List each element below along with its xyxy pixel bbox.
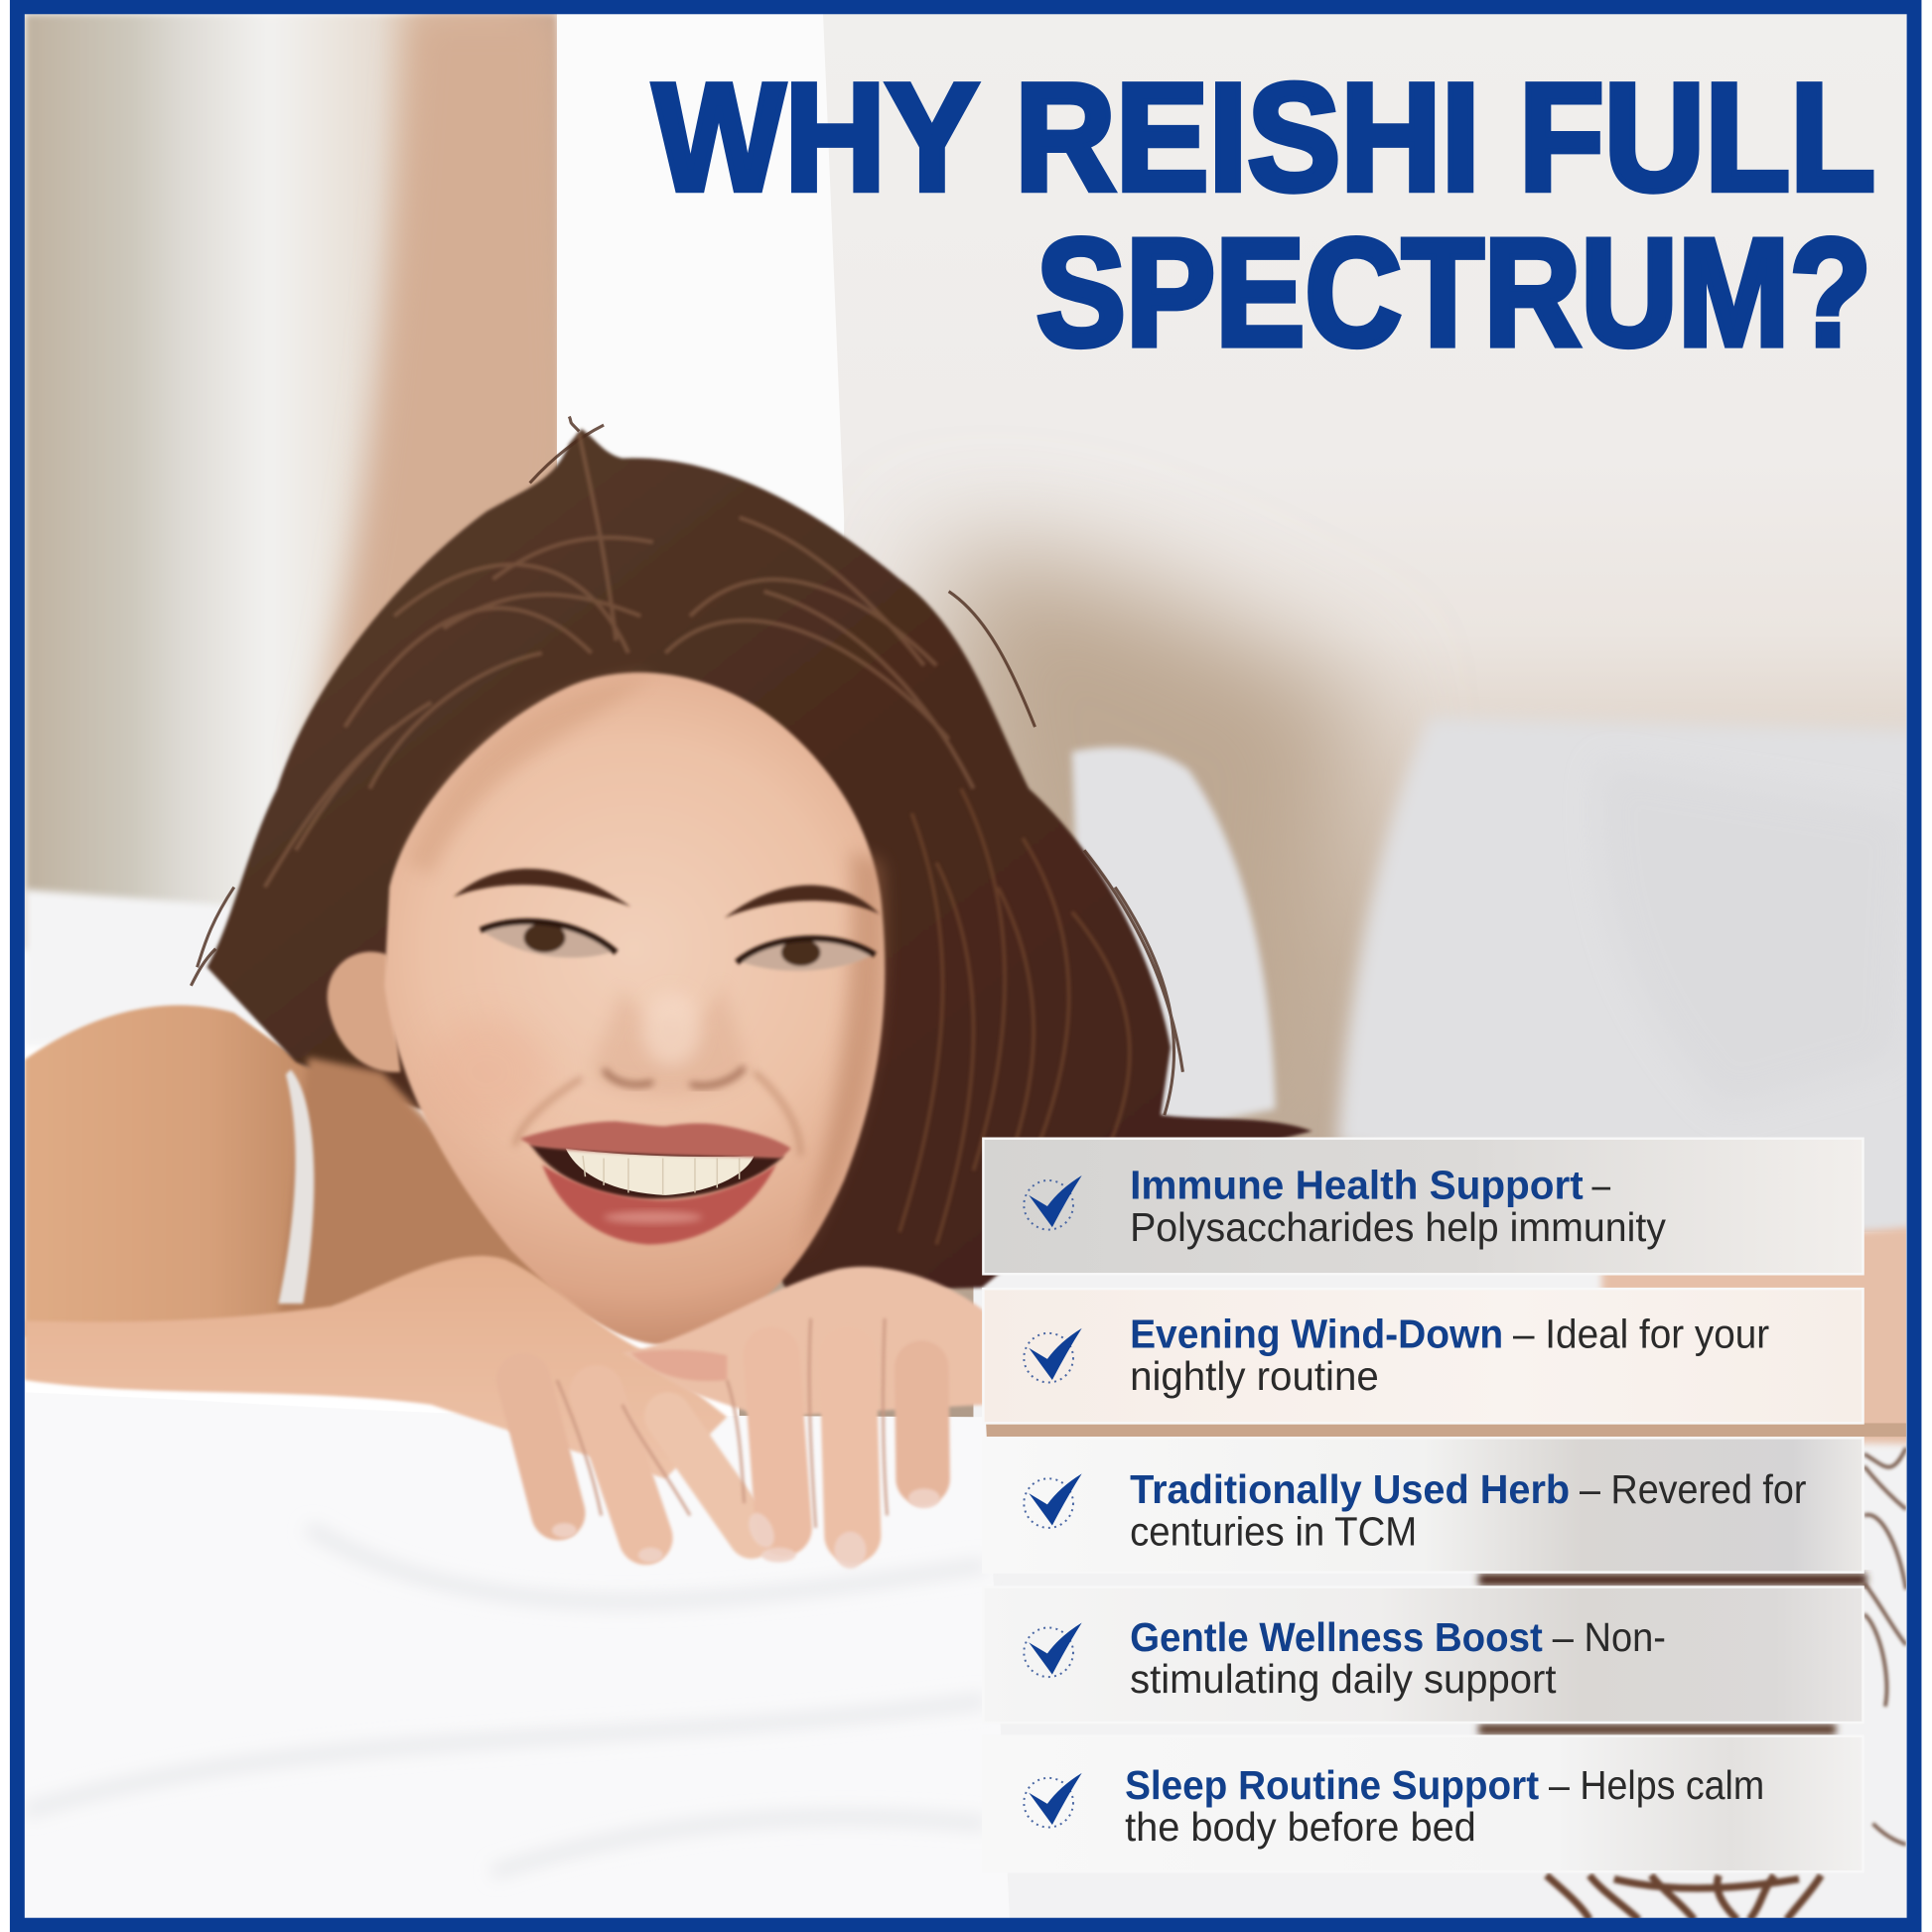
curtains bbox=[25, 14, 557, 950]
middle pillow bbox=[1072, 747, 1276, 1128]
hair highlights bbox=[265, 434, 973, 888]
item text: stimulating daily support bbox=[1130, 1656, 1557, 1702]
icon: check bbox=[1024, 1175, 1082, 1230]
title bbox=[653, 52, 1875, 377]
finger lines bbox=[557, 1318, 888, 1528]
left eye bbox=[481, 921, 617, 958]
item text bbox=[1130, 1311, 1769, 1399]
panel: traditionally used herb bbox=[983, 1438, 1863, 1573]
left sheet behind shoulder bbox=[25, 886, 256, 1044]
item text: Sleep Routine Support bbox=[1125, 1762, 1539, 1808]
panel background bbox=[983, 1736, 1863, 1871]
left cheek blush bbox=[425, 1017, 548, 1128]
right arm bbox=[1601, 1226, 1922, 1445]
item text: – Revered for bbox=[1580, 1466, 1806, 1512]
item text: – bbox=[1591, 1163, 1610, 1208]
top strap bbox=[278, 1069, 314, 1304]
item text bbox=[1130, 1614, 1666, 1702]
right eyebrow bbox=[725, 885, 880, 918]
lower right bed area bbox=[973, 1232, 1922, 1932]
item text: centuries in TCM bbox=[1130, 1508, 1417, 1554]
panel: gentle wellness boost bbox=[983, 1587, 1863, 1723]
white curtain panel bbox=[557, 14, 844, 537]
upper lip bbox=[520, 1121, 791, 1159]
neck and chest bbox=[278, 1057, 617, 1318]
sheet folds bbox=[25, 1528, 986, 1872]
nose shading bbox=[593, 980, 747, 1096]
hair highlights right side bbox=[899, 788, 1130, 1244]
icon: check bbox=[1024, 1328, 1082, 1382]
forehead shadow bbox=[407, 675, 653, 875]
lower lip highlight bbox=[604, 1211, 702, 1223]
smile lines bbox=[515, 1072, 801, 1156]
item text: Evening Wind-Down bbox=[1130, 1311, 1503, 1357]
item text: nightly routine bbox=[1130, 1353, 1379, 1399]
nose tip highlight bbox=[642, 992, 701, 1066]
item text bbox=[1130, 1163, 1666, 1250]
forearm and left hand bbox=[25, 1256, 727, 1478]
pillow crease bbox=[1599, 763, 1910, 1109]
white bed sheet bbox=[739, 1416, 987, 1492]
left eyebrow bbox=[454, 869, 630, 906]
right hand back bbox=[622, 1267, 986, 1417]
ear bbox=[328, 952, 400, 1072]
mouth interior bbox=[530, 1144, 783, 1199]
item text: the body before bed bbox=[1125, 1804, 1476, 1850]
right eye bbox=[737, 938, 875, 971]
back of shoulder bbox=[25, 1006, 333, 1337]
finger nails bbox=[552, 1488, 940, 1569]
item text: – Non- bbox=[1553, 1614, 1666, 1660]
dark hair band between panels 3 and 4 bbox=[1478, 1574, 1866, 1586]
right hand fingers bbox=[771, 1355, 923, 1535]
item text: – Ideal for your bbox=[1513, 1311, 1769, 1357]
item text: – Helps calm bbox=[1549, 1762, 1764, 1808]
item text bbox=[1125, 1762, 1764, 1850]
tan curtain lower taper bbox=[308, 14, 573, 763]
face bbox=[384, 672, 885, 1345]
wall and headboard bbox=[740, 14, 1922, 1492]
hair mass bbox=[207, 429, 1312, 1294]
panel background bbox=[983, 1438, 1863, 1573]
item text bbox=[1130, 1466, 1806, 1554]
nostrils bbox=[604, 1067, 745, 1086]
loose hair wisps bbox=[191, 416, 1182, 1115]
dark hair band between panels 4 and 5 bbox=[1478, 1724, 1836, 1734]
panel: evening wind-down bbox=[983, 1289, 1863, 1423]
hair strands right edge bbox=[1864, 1448, 1906, 1845]
hair strands bottom right bbox=[1547, 1875, 1821, 1920]
teeth bbox=[566, 1149, 755, 1195]
right pillow bbox=[1337, 717, 1932, 1257]
right cheek shadow bbox=[801, 850, 884, 1257]
panel background bbox=[983, 1139, 1863, 1274]
skin band between panels bbox=[982, 1423, 1906, 1437]
panel background bbox=[983, 1587, 1863, 1723]
item text: Gentle Wellness Boost bbox=[1130, 1614, 1543, 1660]
item text: Traditionally Used Herb bbox=[1130, 1466, 1570, 1512]
left hand fingers bbox=[523, 1380, 752, 1538]
panel: immune health bbox=[983, 1139, 1863, 1274]
icon: check bbox=[1024, 1622, 1082, 1677]
tooth lines bbox=[583, 1156, 740, 1195]
beige headboard shadow bbox=[936, 553, 1355, 1134]
item text: Immune Health Support bbox=[1130, 1163, 1584, 1208]
icon: check bbox=[1024, 1773, 1082, 1828]
panel background bbox=[983, 1289, 1863, 1423]
item text: Polysaccharides help immunity bbox=[1130, 1204, 1666, 1250]
lower lip bbox=[542, 1165, 776, 1244]
thumb bbox=[630, 1350, 727, 1381]
panel: sleep routine support bbox=[983, 1736, 1863, 1871]
icon: check bbox=[1024, 1473, 1082, 1528]
